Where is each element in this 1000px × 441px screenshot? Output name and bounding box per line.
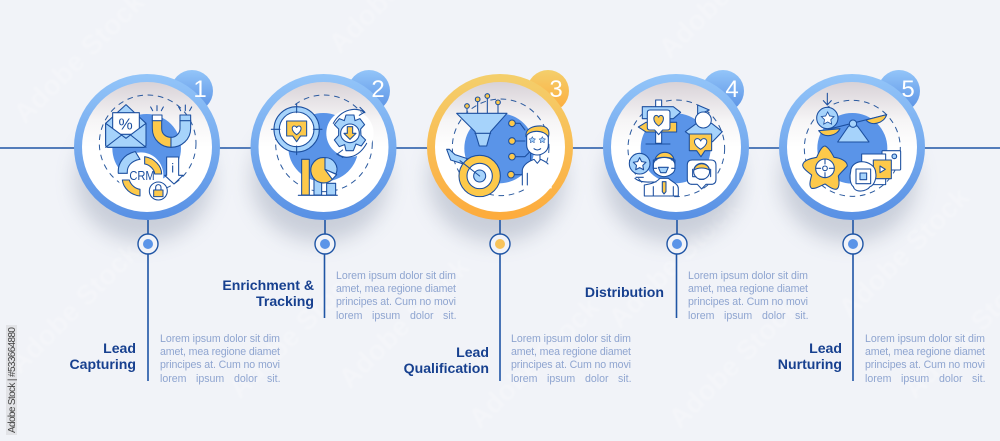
heading 5: Nurturing: [778, 356, 842, 372]
step 2 badge: [348, 70, 390, 112]
text block 4: Lorem ipsum dolor sit dim: [688, 270, 808, 282]
marker dot 4: [667, 220, 687, 254]
watermark: Adobe Stock: [332, 251, 476, 394]
text block 1: ipsum: [196, 373, 224, 385]
text block 3: amet, mea regione diamet: [511, 346, 631, 358]
connector 4: [676, 254, 678, 318]
step 3 ring: [427, 74, 573, 220]
icon: lead capturing: [99, 95, 196, 200]
watermark: Adobe Stock: [222, 261, 366, 404]
text block 4: dolor: [762, 310, 786, 322]
text block 3: lorem: [511, 373, 538, 385]
text block 3: sit.: [618, 373, 632, 385]
heading 1: Capturing: [69, 356, 136, 372]
step 4 badge: [702, 70, 744, 112]
text block 1: lorem: [160, 373, 187, 385]
text block 2: sit.: [443, 310, 457, 322]
step 2: [222, 70, 457, 322]
text block 2: ipsum: [372, 310, 400, 322]
text block 4: ipsum: [724, 310, 752, 322]
text block 1: Lorem ipsum dolor sit dim: [160, 333, 280, 345]
text block 4: sit.: [795, 310, 809, 322]
watermark: Adobe Stock: [662, 291, 806, 434]
watermark: Adobe Stock: [602, 191, 746, 334]
step 4 number: 4: [725, 76, 739, 103]
icon: lead capturing: i: [171, 162, 174, 176]
heading 2: Tracking: [256, 293, 314, 309]
text block 1: sit.: [267, 373, 281, 385]
icon: lead qualification: [447, 94, 552, 197]
step 5 badge: [878, 70, 920, 112]
step 4 ring: [603, 74, 749, 220]
stock id caption: Adobe Stock | #533664880: [7, 327, 18, 433]
step 3: [404, 70, 632, 385]
heading 5: Lead: [809, 340, 842, 356]
text block 5: ipsum: [901, 373, 929, 385]
text block 4: [688, 270, 809, 322]
text block 1: [160, 333, 281, 385]
text block 2: [336, 270, 457, 322]
connector 1: [147, 254, 149, 381]
icon: enrichment and tracking: [271, 95, 374, 195]
text block 3: principes at. Cum no movi: [511, 359, 631, 371]
text block 2: principes at. Cum no movi: [336, 296, 456, 308]
text block 5: dolor: [939, 373, 963, 385]
icon: distribution: [628, 100, 725, 197]
heading 3: Qualification: [404, 360, 489, 376]
text block 5: [865, 333, 986, 385]
text block 3: ipsum: [547, 373, 575, 385]
step 4: [585, 70, 809, 322]
text block 4: lorem: [688, 310, 715, 322]
text block 2: lorem: [336, 310, 363, 322]
marker dot 5: [843, 220, 863, 254]
heading 2: Enrichment &: [222, 277, 314, 293]
step 5: [778, 70, 986, 385]
connector 5: [852, 254, 854, 381]
step 3 number: 3: [549, 76, 563, 103]
text block 4: amet, mea regione diamet: [688, 283, 808, 295]
text block 5: amet, mea regione diamet: [865, 346, 985, 358]
text block 2: dolor: [410, 310, 434, 322]
icon: lead capturing: %: [119, 116, 133, 133]
step 5 ring: [779, 74, 925, 220]
marker dot 2: [315, 220, 335, 254]
text block 3: [511, 333, 632, 385]
step 1: [69, 70, 281, 385]
step 2 ring: [250, 74, 396, 220]
text block 1: dolor: [234, 373, 258, 385]
text block 5: principes at. Cum no movi: [865, 359, 985, 371]
step 5 number: 5: [901, 76, 915, 103]
text block 5: Lorem ipsum dolor sit dim: [865, 333, 985, 345]
watermark: Adobe Stock: [462, 291, 606, 434]
text block 4: principes at. Cum no movi: [688, 296, 808, 308]
text block 1: amet, mea regione diamet: [160, 346, 280, 358]
step 2 number: 2: [371, 76, 385, 103]
heading 4: Distribution: [585, 284, 664, 300]
text block 1: principes at. Cum no movi: [160, 359, 280, 371]
text block 5: sit.: [972, 373, 986, 385]
connector 3: [499, 254, 501, 381]
watermark: Adobe Stock: [832, 181, 976, 324]
icon: lead nurturing: [803, 93, 901, 196]
timeline horizontal line: [0, 147, 1000, 149]
marker dot 3: [490, 220, 510, 254]
text block 2: Lorem ipsum dolor sit dim: [336, 270, 456, 282]
text block 3: Lorem ipsum dolor sit dim: [511, 333, 631, 345]
marker dot 1: [138, 220, 158, 254]
text block 2: amet, mea regione diamet: [336, 283, 456, 295]
heading 1: Lead: [103, 340, 136, 356]
step 3 badge: [527, 70, 569, 112]
icon: lead capturing: CRM: [129, 169, 155, 183]
step 1 ring: [74, 74, 220, 220]
text block 3: dolor: [585, 373, 609, 385]
step 1 number: 1: [193, 76, 207, 103]
watermark: Adobe Stock: [2, 236, 146, 379]
heading 3: Lead: [456, 344, 489, 360]
step 1 badge: [171, 70, 213, 112]
connector 2: [324, 254, 326, 318]
text block 5: lorem: [865, 373, 892, 385]
